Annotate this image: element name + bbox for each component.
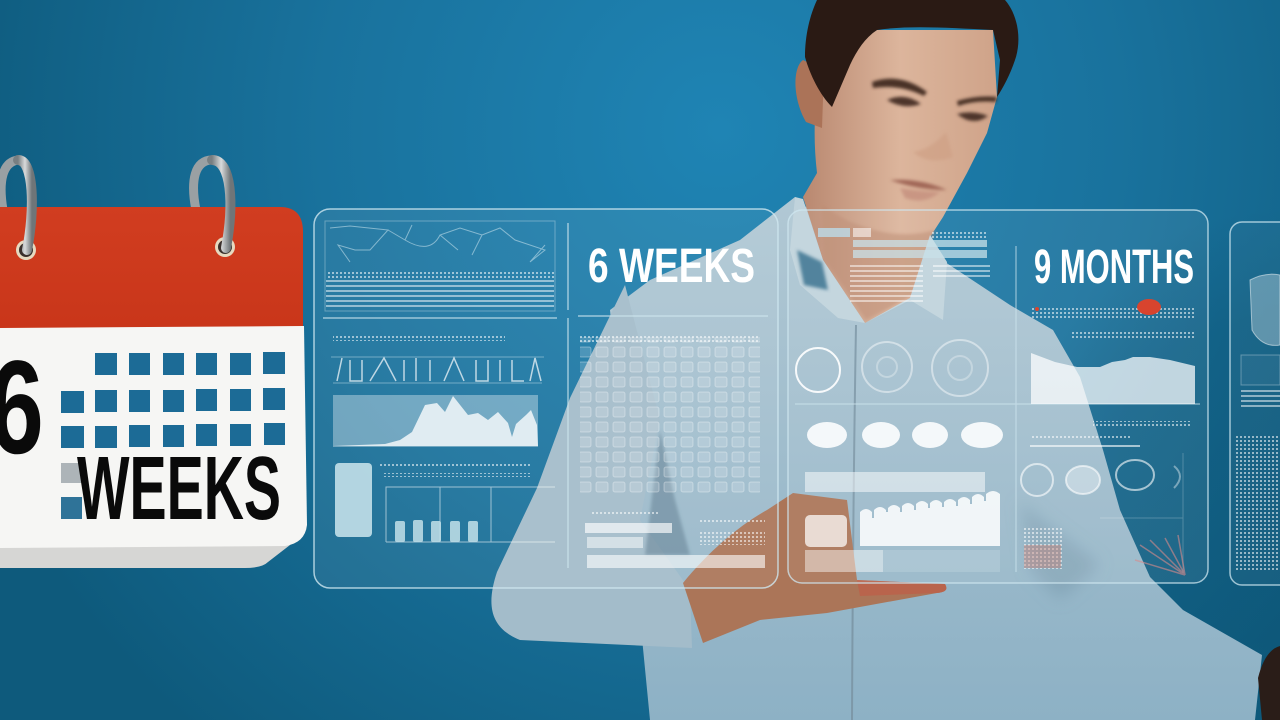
ring back legs (1, 160, 212, 210)
dividers (323, 223, 768, 568)
glyph row (331, 357, 544, 383)
text rows (380, 462, 532, 477)
calendar icon (0, 160, 307, 568)
hair (805, 0, 1018, 107)
left sleeve (491, 285, 692, 648)
shirt torso (610, 197, 1262, 720)
calendar lower page (0, 500, 295, 568)
bar chart (386, 487, 555, 542)
calendar label weeks: WEEKS (77, 439, 281, 539)
small box (1241, 355, 1280, 385)
hand left (683, 493, 946, 643)
man presenting (491, 0, 1280, 720)
panel: 6 weeks (314, 209, 778, 588)
shirt placket (852, 325, 856, 720)
thumbnail chart (1023, 527, 1062, 569)
small rows (1241, 388, 1280, 409)
heading: 6 weeks: 6 WEEKS (588, 240, 755, 293)
neck shade (822, 205, 935, 320)
panel: right partial (1230, 222, 1280, 585)
bar chart (805, 472, 1000, 572)
network chart (325, 221, 555, 311)
area chart (333, 395, 538, 447)
ring right (212, 160, 235, 257)
ear (795, 60, 824, 128)
text block top (818, 228, 990, 302)
side block (335, 463, 372, 537)
frame lines (1100, 453, 1183, 573)
table bars (585, 512, 765, 568)
dividers (795, 246, 1200, 572)
calendar red header (0, 207, 303, 328)
collar left (790, 197, 865, 323)
collar underside (797, 250, 828, 290)
panel: 9 months (788, 210, 1208, 583)
neck and face (803, 30, 997, 323)
date grid (61, 352, 285, 519)
finger shade (857, 580, 946, 596)
heading: 9 months: 9 MONTHS (1034, 241, 1194, 294)
lower right rows (1030, 421, 1190, 447)
scatter row (1032, 299, 1195, 338)
shield graphic (1250, 274, 1280, 345)
icon row: circles (796, 340, 988, 396)
texture block (1236, 434, 1280, 570)
icon row: pills (807, 422, 1003, 448)
facial features (872, 79, 997, 200)
area chart (1031, 353, 1195, 404)
background right shade (1010, 210, 1280, 720)
sleeve shade right (1020, 500, 1100, 600)
calendar body (0, 326, 307, 548)
ring left (16, 160, 36, 260)
outline icons (1021, 460, 1180, 496)
data table (580, 336, 760, 494)
collar right (865, 235, 947, 323)
wrist and watch (1258, 646, 1280, 720)
caption row (333, 335, 505, 341)
fan chart (1135, 535, 1185, 575)
underarm shade (645, 430, 690, 555)
